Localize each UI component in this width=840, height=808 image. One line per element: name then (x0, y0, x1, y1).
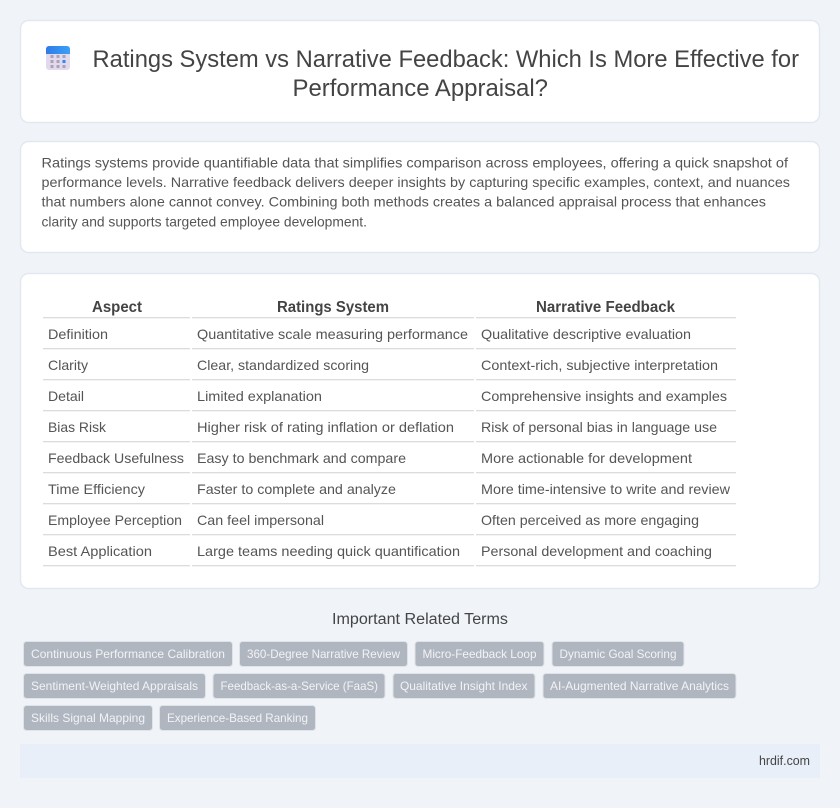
panel: summary text: performance levels. Narrative feedback delivers deeper insights by capturing specific examples, context, and nuances (42, 174, 790, 190)
row: clarity: Clear, standardized scoring (197, 357, 369, 373)
row: feedback usefulness: Feedback Usefulness (48, 450, 184, 466)
row: detail: Comprehensive insights and examples (481, 388, 727, 404)
row: feedback usefulness: More actionable for development (481, 450, 692, 466)
tag (24, 674, 206, 698)
row: definition: Definition (48, 326, 108, 342)
row: bias risk (48, 419, 717, 435)
tag: Sentiment-Weighted Appraisals (31, 679, 198, 693)
panel: summary text: Ratings systems provide quantifiable data that simplifies comparison across employees, offering a quick snapshot of (42, 154, 788, 170)
tag: Qualitative Insight Index (400, 679, 528, 693)
title: Performance Appraisal? (292, 75, 548, 102)
heading: important related terms: Important Related Terms (332, 611, 508, 628)
row: clarity: Clarity (48, 357, 88, 373)
panel: summary text: that numbers alone cannot convey. Combining both methods creates a balanced appraisal process that enhances (42, 194, 766, 210)
panel: comparison table (20, 274, 820, 588)
table header: Narrative Feedback (536, 299, 675, 316)
tag: Dynamic Goal Scoring (560, 647, 676, 661)
row: clarity (48, 357, 718, 373)
tag: Skills Signal Mapping (31, 711, 145, 725)
row: feedback usefulness (48, 450, 692, 466)
row: employee perception (48, 512, 699, 528)
tag: Feedback-as-a-Service (FaaS) (220, 679, 378, 693)
tag: Micro-Feedback Loop (422, 647, 537, 661)
row: feedback usefulness: Easy to benchmark and compare (197, 450, 406, 466)
title (92, 46, 799, 102)
table header: Ratings System (277, 299, 389, 316)
row: detail: Detail (48, 388, 84, 404)
table header (92, 299, 675, 316)
panel: title card (20, 20, 820, 122)
footer (20, 744, 820, 778)
row: employee perception: Employee Perception (48, 512, 182, 528)
title: Ratings System vs Narrative Feedback: Which Is More Effective for (92, 46, 799, 73)
panel: related term tags (24, 642, 736, 730)
row: best application: Large teams needing quick quantification (197, 543, 460, 559)
row: time efficiency: More time-intensive to write and review (481, 481, 731, 497)
footer: hrdif.com (759, 754, 810, 768)
row: employee perception: Can feel impersonal (197, 512, 324, 528)
panel: summary text (20, 142, 820, 252)
tag: Continuous Performance Calibration (31, 647, 225, 661)
row: bias risk: Risk of personal bias in language use (481, 419, 717, 435)
row: bias risk: Higher risk of rating inflation or deflation (197, 419, 454, 435)
icon: calendar (46, 46, 70, 70)
row: best application: Personal development and coaching (481, 543, 712, 559)
tag (543, 674, 736, 698)
tag (24, 642, 232, 666)
row: detail: Limited explanation (197, 388, 322, 404)
row: definition: Qualitative descriptive evaluation (481, 326, 691, 342)
row: time efficiency: Time Efficiency (48, 481, 145, 497)
row: time efficiency (48, 481, 731, 497)
row: definition: Quantitative scale measuring performance (197, 326, 468, 342)
tag (415, 642, 544, 666)
row: definition (48, 326, 691, 342)
row: time efficiency: Faster to complete and analyze (197, 481, 396, 497)
tag: AI-Augmented Narrative Analytics (550, 679, 729, 693)
row: bias risk: Bias Risk (48, 419, 107, 435)
tag (160, 706, 316, 730)
tag (213, 674, 385, 698)
tag (24, 706, 152, 730)
tag (393, 674, 535, 698)
row: best application: Best Application (48, 543, 152, 559)
tag: Experience-Based Ranking (167, 711, 308, 725)
tag: 360-Degree Narrative Review (247, 647, 400, 661)
row: detail (48, 388, 727, 404)
tag (240, 642, 408, 666)
tag (552, 642, 684, 666)
row: clarity: Context-rich, subjective interpretation (481, 357, 718, 373)
panel: summary text: clarity and supports targeted employee development. (42, 213, 367, 229)
row: employee perception: Often perceived as more engaging (481, 512, 699, 528)
row: best application (48, 543, 712, 559)
table header: Aspect (92, 299, 142, 316)
